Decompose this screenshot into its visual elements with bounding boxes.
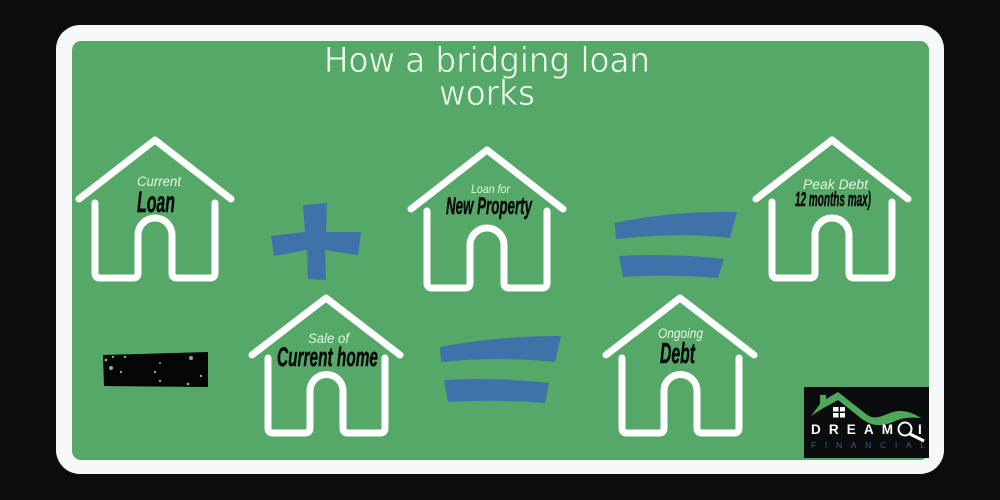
house: sale of current home: Sale of [308, 331, 350, 346]
icon: logo window [833, 407, 845, 418]
house: peak debt: 12 months max) [795, 189, 871, 211]
icon: plus sign [271, 203, 361, 280]
logo subline: FINANCIAL [811, 440, 925, 450]
house: loan for new property: Loan for [471, 182, 511, 196]
icon: magnifying glass [898, 422, 924, 441]
house: current loan: Loan [137, 186, 175, 219]
title [324, 41, 650, 114]
house: ongoing debt [606, 298, 754, 433]
house: ongoing debt: Debt [660, 338, 696, 370]
icon: minus sign [103, 352, 208, 387]
logo wordmark: DREAM [811, 422, 893, 437]
house: sale of current home [252, 298, 400, 433]
panel: white frame [56, 25, 944, 474]
house: ongoing debt: Ongoing [658, 326, 703, 341]
house: peak debt: Peak Debt [803, 177, 869, 192]
icon: equals sign top [615, 212, 737, 278]
title: works [439, 74, 535, 114]
house: loan for new property [411, 150, 563, 288]
logo letter: I [918, 422, 922, 437]
house: current loan [79, 140, 231, 278]
title: How a bridging loan [324, 41, 650, 81]
icon: equals sign bottom [440, 336, 561, 403]
house: sale of current home: Current home [277, 342, 378, 372]
house: current loan: Current [137, 174, 182, 189]
logo: Dream Financial [804, 387, 929, 458]
icon: logo roof [811, 392, 921, 425]
panel: green background [72, 41, 929, 460]
house: peak debt [756, 140, 908, 278]
house: loan for new property: New Property [446, 193, 533, 220]
